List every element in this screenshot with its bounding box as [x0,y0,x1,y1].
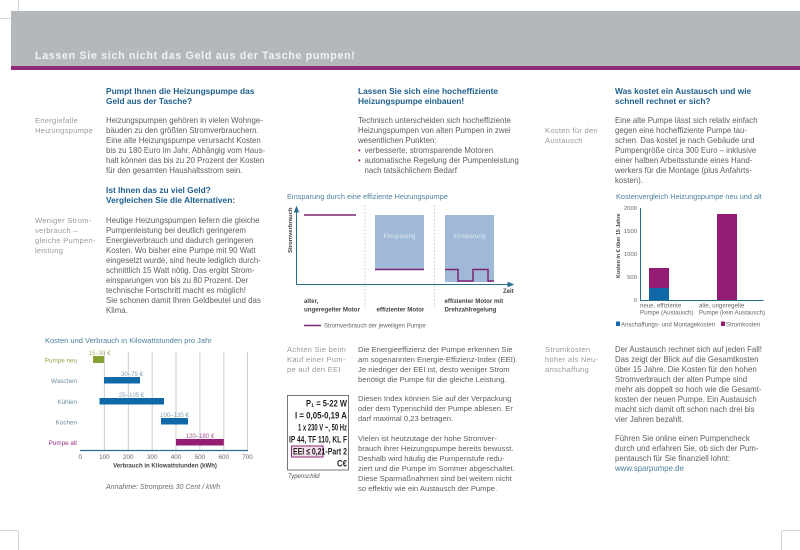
category labels: Kühlen [57,399,77,406]
side label: replacement cost [545,126,598,145]
heading: alternatives: Vergleichen Sie die Alternativen: [106,195,235,205]
text: payback: mehr als doppelt so hoch wie die Gesamt- [615,385,762,394]
category labels: Pumpe alt [49,440,77,447]
text: alternatives: Pumpenleistung bei deutlich geringerem [106,226,246,235]
text: payback: Der Austausch rechnet sich auf jeden Fall! [615,345,762,354]
heading: pump costs: Geld aus der Tasche? [106,96,192,106]
side label: electricity cost: Stromkosten [545,345,590,354]
text: replacement cost [615,116,758,185]
banner magenta rule [11,66,800,70]
legend [616,322,760,328]
motor labels: ungeregelter Motor [304,306,361,314]
bar value labels: 30–75 € [121,371,144,378]
axis ticks: 400 [171,454,182,461]
text: alternatives: Sie schonen damit Ihren Geldbeutel und das [106,296,261,305]
text: power saving: so effektiv wie ein Austausch der Pumpe. [358,484,497,493]
motor labels: effizienter Motor mit [444,298,503,305]
axis ticks: 600 [219,454,230,461]
text: reading index: darf maximal 0,23 betragen. [358,414,453,423]
axis title: Verbrauch in Kilowattstunden (kWh) [113,464,217,470]
type plate: P₁ = 5-22 W [306,398,347,408]
bar value labels: 100–135 € [160,412,190,419]
side label: energy trap: Heizungspumpe [35,126,93,135]
legend: Anschaffungs- und Montagekosten [621,322,715,328]
text: online check [615,434,758,473]
category labels: alte, ungeregelte [699,302,745,310]
text: alternatives: einsparungen von bis zu 80 Prozent. Der [106,276,248,285]
bar value labels: 15–30 € [88,350,111,357]
category labels [640,302,765,316]
y ticks: 0 [634,298,638,304]
motor labels: alter, [304,298,319,305]
type plate: C€ [337,458,347,468]
axis ticks [79,454,253,461]
text: energy trap [106,116,265,175]
text: differences: wesentlichen Punkten: [358,136,436,145]
motor labels: effizienter Motor [376,306,425,314]
y ticks [624,206,638,304]
motor labels [304,298,503,314]
text: alternatives: Kosten. Wo bisher eine Pumpe mit 90 Watt [106,246,256,255]
text: differences: nach tatsächlichem Bedarf [364,166,457,175]
text: differences: • [358,146,361,155]
side label: replacement cost: Kosten für den [545,126,598,135]
text: payback: über 15 Jahre. Die Kosten für den hohen [615,365,757,374]
motor labels: Drehzahlregelung [444,306,497,314]
category labels: Waschen [51,378,77,385]
text: replacement cost: gegen eine hocheffiziente Pumpe tau- [615,126,747,135]
text: energy trap: Eine alte Heizungspumpe verursacht Kosten [106,136,261,145]
text: energy trap: bis zu 180 Euro im Jahr. Abhängig vom Haus- [106,146,265,155]
type plate: IP 44, TF 110, KL F [289,434,347,444]
y axis label: Stromverbrauch [288,207,294,253]
text: reading index: Diesen Index können Sie auf der Verpackung [358,394,511,403]
text: differences: Heizungspumpen von alten Pumpen in zwei [358,126,511,135]
category labels: Pumpe (Austausch) [640,310,694,316]
type plate: I = 0,05-0,19 A [295,410,347,420]
text: payback: vier Jahren bezahlt. [615,415,683,424]
axis ticks: 700 [242,454,253,461]
legend: Stromkosten [726,322,760,328]
text: differences: Technisch unterscheiden sich hocheffiziente [358,116,511,125]
text: power saving: Diese Sparmaßnahmen sind bei weitem nicht [358,474,512,483]
text: differences: verbesserte, stromsparende Motoren [364,146,493,155]
text: replacement cost: einer halben Arbeitsstunde eines Hand- [615,156,752,165]
side label: lower consumption: gleiche Pumpen- [35,236,96,245]
side label: lower consumption: Weniger Strom- [35,216,92,225]
side label: lower consumption [35,216,96,255]
text: alternatives: Klima. [106,306,128,315]
consumption lines [304,215,494,281]
text: online check: Führen Sie online einen Pumpencheck [615,434,750,443]
text: payback: Stromverbrauch der alten Pumpe sind [615,375,747,384]
y ticks: 500 [627,275,638,281]
legend: Stromverbrauch der jeweiligen Pumpe [324,324,426,330]
text: energy trap: halt können das bis zu 20 Prozent der Kosten [106,156,264,165]
type plate: EEI ≤ 0,21-Part 2 [293,446,347,456]
text: power saving: brauch ihrer Heizungspumpe bereits bewusst. [358,444,513,453]
heading: replacement cost [615,86,751,106]
savings blocks: Einsparung [454,233,486,240]
text: payback [615,345,762,424]
category labels: Kochen [56,420,77,426]
axis [80,450,248,452]
stacked bars [649,214,737,300]
axis ticks: 0 [79,454,83,461]
side label: EEI: pe auf den EEI [287,365,341,374]
text: replacement cost: schen. Das kostet je nach Gebäude und [615,136,755,145]
text: replacement cost: werkers für die Montage (plus Anfahrts- [615,166,752,175]
text: EEI: Die Energieeffizienz der Pumpe erkennen Sie [358,345,512,354]
savings blocks [375,215,494,282]
text: alternatives: technische Fortschritt macht es möglich! [106,286,246,295]
side label: EEI: Achten Sie beim [287,345,346,354]
heading: alternatives [106,185,235,205]
category labels [45,358,77,447]
side label: lower consumption: verbrauch – [35,226,78,235]
bars [93,356,224,446]
text: power saving: Vielen ist heutzutage der hohe Stromver- [358,434,497,443]
banner title: Lassen Sie sich nicht das Geld aus der Tasche pumpen! [35,50,356,62]
text: online check: durch und erfahren Sie, ob sich der Pum- [615,444,758,453]
text: energy trap: Heizungspumpen gehören in vielen Wohnge- [106,116,263,125]
y axis title: Kosten in € über 15 Jahre [616,213,622,278]
axis ticks: 500 [195,454,206,461]
text: reading index: oder dem Typenschild der Pumpe ablesen. Er [358,404,513,413]
side label: electricity cost [545,345,598,374]
text: power saving [358,434,515,493]
text: EEI: benötigt die Pumpe für die gleiche Leistung. [358,375,507,384]
y ticks: 2000 [624,206,638,212]
chart title: cost comparison: Kostenvergleich Heizungspumpe neu und alt [616,192,762,201]
chart title: cost and consumption: Kosten und Verbrauch in Kilowattstunden pro Jahr [45,336,212,345]
heading: replacement cost: schnell rechnet er sich? [615,96,711,106]
text: alternatives: schnittlich 15 Watt nötig. Das ergibt Strom- [106,266,254,275]
text: EEI: Je niedriger der EEI ist, desto weniger Strom [358,365,510,374]
side label: energy trap: Energiefalle [35,116,78,125]
y ticks: 1000 [624,252,638,258]
category labels: neue, effiziente [640,302,682,310]
heading: high-efficiency pump [358,86,498,106]
type plate caption: Typenschild [288,474,320,480]
bar value labels: 25–105 € [119,392,145,399]
text: online check: www.sparpumpe.de [615,464,684,473]
text: alternatives: Heutige Heizungspumpen liefern die gleiche [106,216,260,225]
savings blocks: Einsparung [384,233,416,240]
text: payback: Das zeigt der Blick auf die Gesamtkosten [615,355,758,364]
assumption note: Annahme: Strompreis 30 Cent / kWh [106,484,220,491]
y ticks: 1500 [624,229,638,235]
side label: electricity cost: anschaffung [545,365,589,374]
header banner [11,11,800,70]
side label: EEI: Kauf einer Pum- [287,355,346,364]
axes [294,207,513,286]
type plate: 1 x 230 V ~, 50 Hz [298,422,347,432]
text: EEI: am sogenannten Energie-Effizienz-Index (EEI). [358,355,518,364]
category labels: Pumpe (kein Austausch) [699,310,765,316]
bar value labels [88,350,215,440]
savings diagram: Zeit [503,289,514,295]
heading: pump costs [106,86,254,106]
text: payback: kosten der neuen Pumpe. Ein Austausch [615,395,757,404]
text: energy trap: bäuden zu den größten Stromverbrauchern. [106,126,259,135]
axis ticks: 100 [99,454,110,461]
text: replacement cost: Pumpengröße circa 300 Euro – inklusive [615,146,756,155]
text: differences: automatische Regelung der Pumpenleistung [364,156,519,165]
text: energy trap: für den gesamten Haushaltsstrom sein. [106,166,242,175]
text: EEI [358,345,518,384]
text: online check: pentausch für Sie finanziell lohnt: [615,454,730,463]
text: replacement cost: kosten). [615,176,643,185]
text: alternatives [106,216,261,315]
text: reading index [358,394,513,423]
side label: lower consumption: leistung [35,246,63,255]
text: differences: • [358,156,361,165]
side label: EEI [287,345,346,374]
text: alternatives: eingesetzt wurde, sind heute lediglich durch- [106,256,261,265]
text: power saving: Deshalb wird häufig die Pumpenstufe redu- [358,454,505,463]
chart title: savings: Einsparung durch eine effiziente Heizungspumpe [287,192,448,201]
category labels: Pumpe neu [45,358,77,364]
text: power saving: ziert und die Pumpe im Sommer abgeschaltet. [358,464,515,473]
side label: electricity cost: höher als Neu- [545,355,598,364]
axis ticks: 300 [147,454,158,461]
text: payback: macht sich damit oft schon nach drei bis [615,405,755,414]
side label: replacement cost: Austausch [545,136,583,145]
axis ticks: 200 [123,454,134,461]
bar value labels: 120–180 € [186,433,215,440]
text: replacement cost: Eine alte Pumpe lässt sich relativ einfach [615,116,758,125]
heading: replacement cost: Was kostet ein Austausch und wie [615,86,751,96]
heading: pump costs: Pumpt Ihnen die Heizungspumpe das [106,86,254,96]
text: alternatives: Energieverbrauch und dadurch geringeren [106,236,253,245]
heading: high-efficiency pump: Heizungspumpe einbauen! [358,96,464,106]
heading: alternatives: Ist Ihnen das zu viel Geld? [106,185,211,195]
side label: energy trap [35,116,93,135]
text: differences [358,116,519,175]
heading: high-efficiency pump: Lassen Sie sich eine hocheffiziente [358,86,498,96]
